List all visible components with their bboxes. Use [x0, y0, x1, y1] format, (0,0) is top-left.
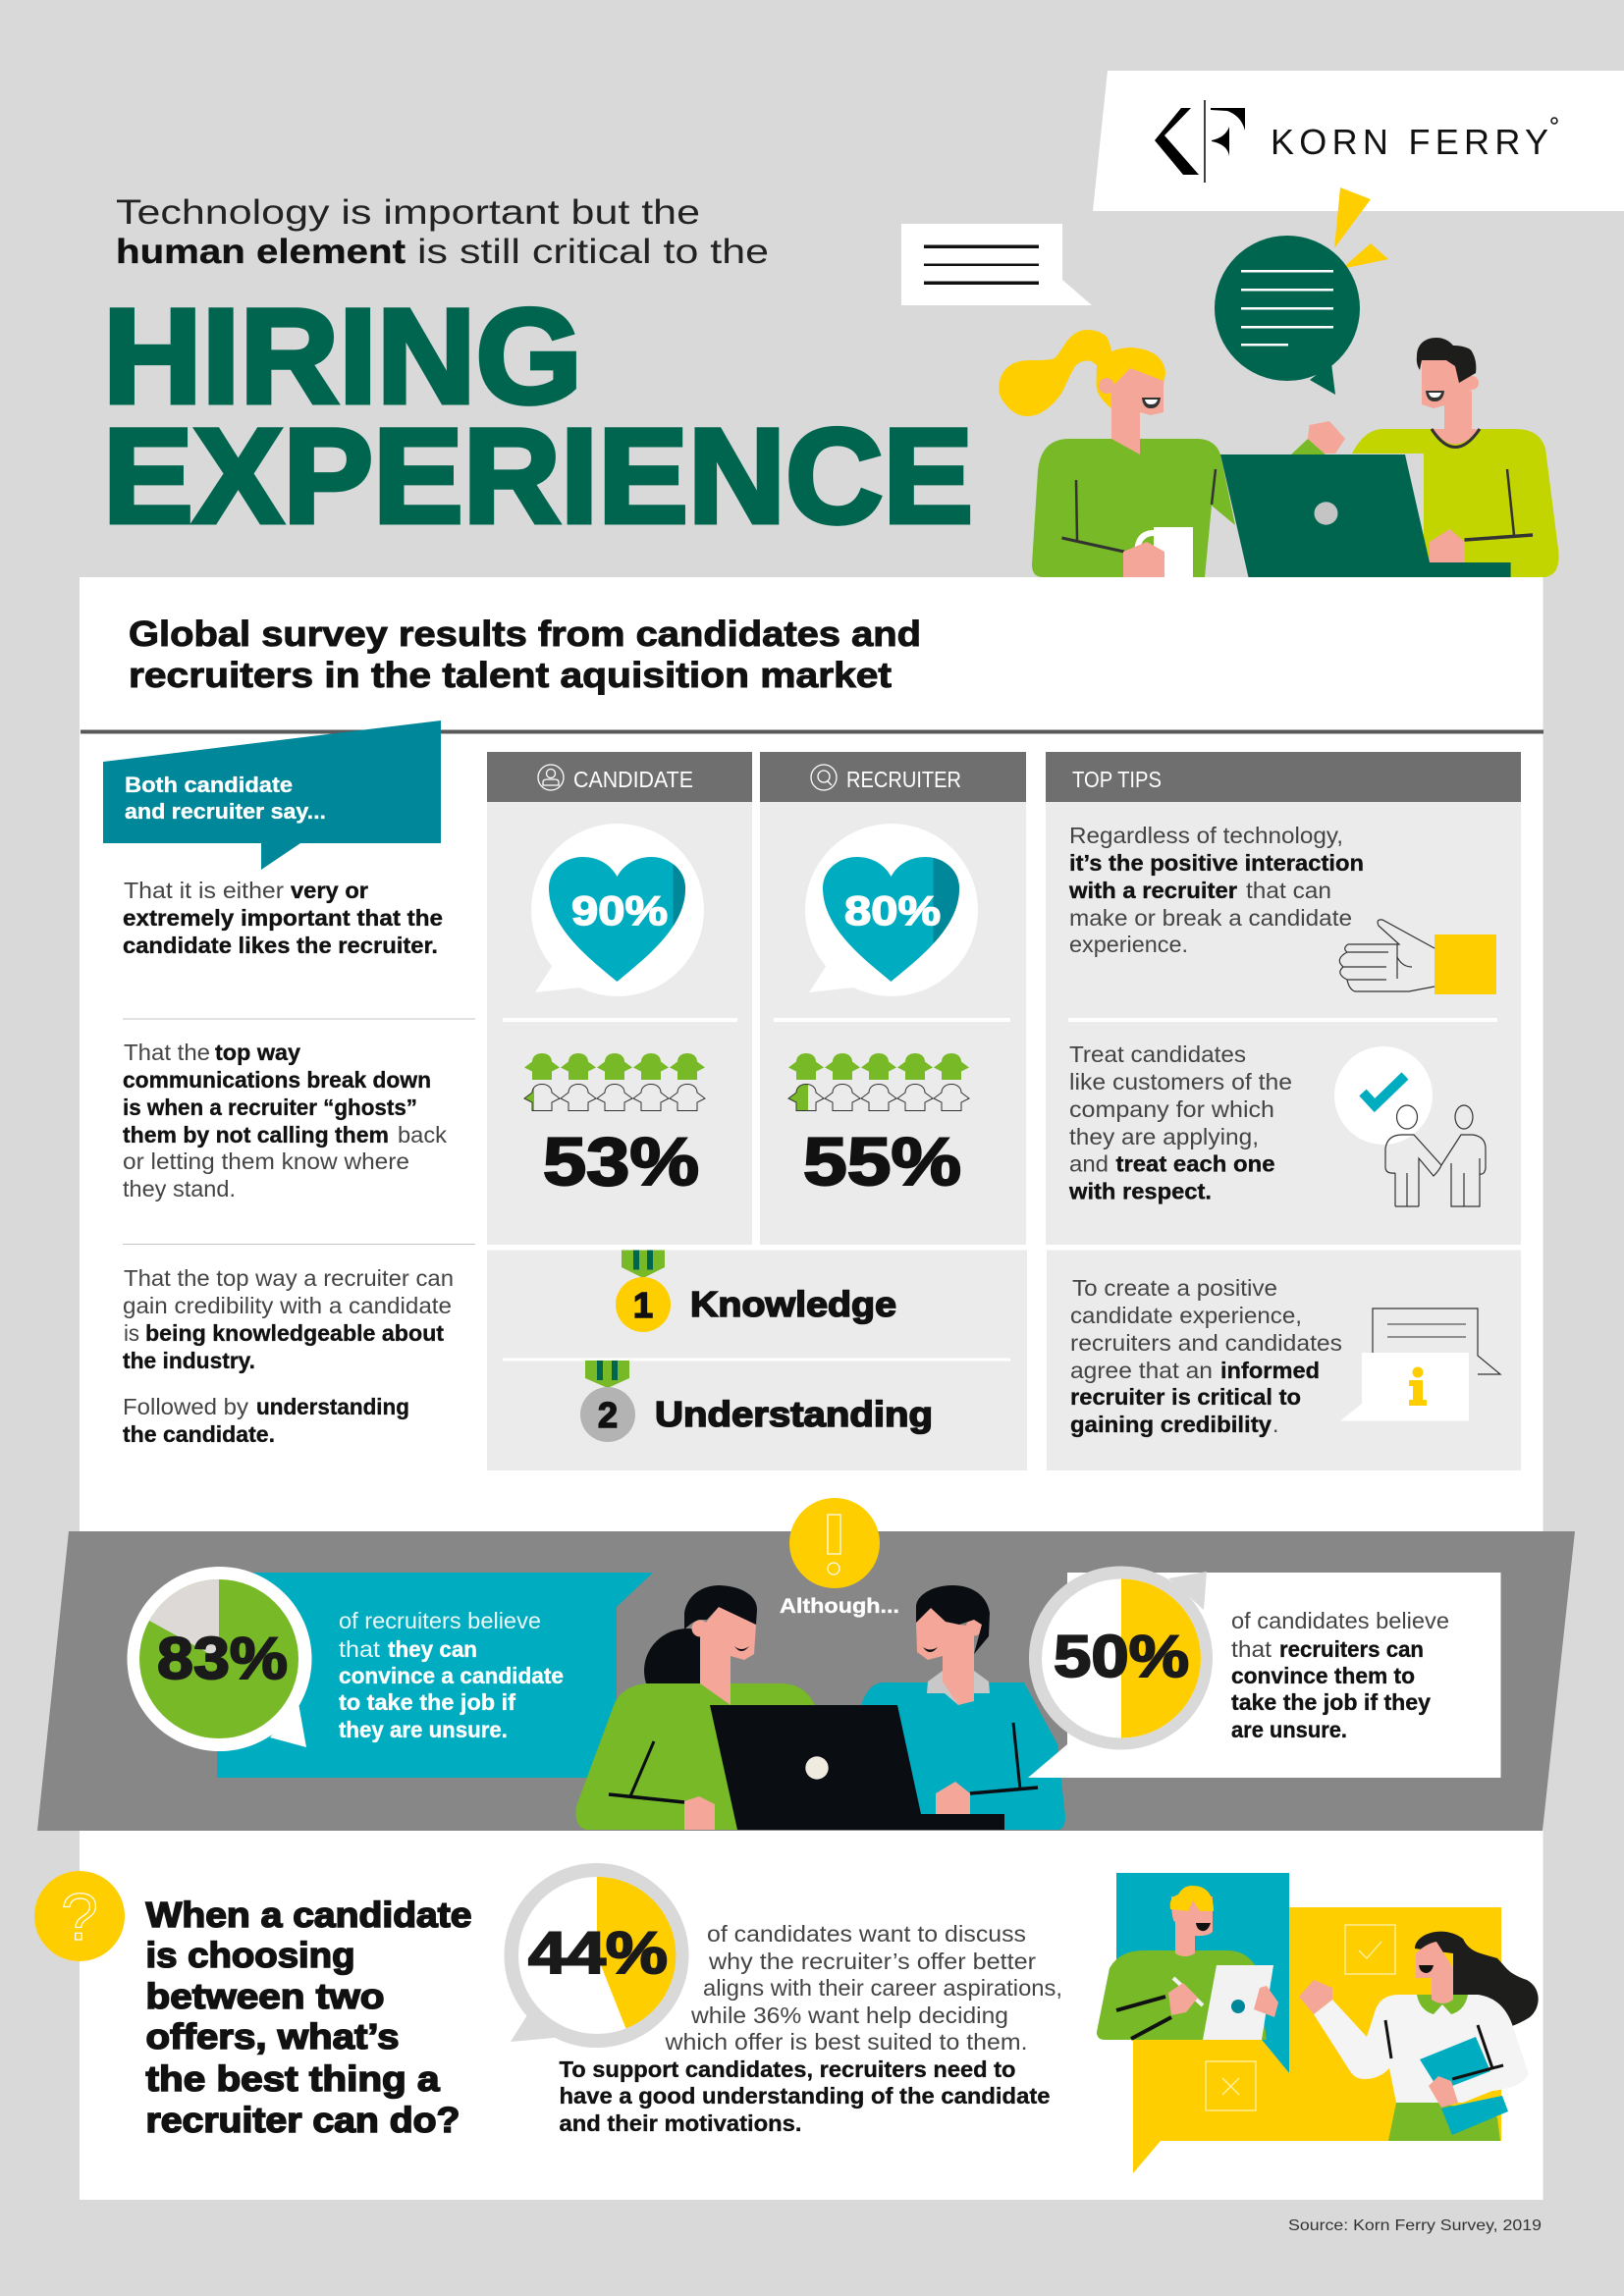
- tip 2 text: they are applying,: [1069, 1124, 1259, 1149]
- recruiters text: they are unsure.: [339, 1717, 508, 1742]
- text block: ghosting: is when a recruiter “ghosts”: [123, 1095, 417, 1120]
- icon: question mark: [34, 1871, 125, 1961]
- panel: grey band: [37, 1531, 1575, 1831]
- text block: likes the recruiter: candidate likes the recruiter.: [123, 933, 438, 958]
- icon: recruiter magnifier: [811, 765, 837, 790]
- pie chart: 44%: 44%: [528, 1920, 668, 1986]
- tip 1 text: Regardless of technology,: [1069, 823, 1343, 848]
- tip 2 text: and: [1069, 1150, 1109, 1176]
- heading: choosing between two offers: between two: [145, 1976, 385, 2016]
- panel: recruiter column: RECRUITER: [846, 767, 961, 792]
- tip 3 text: gaining credibility: [1070, 1412, 1272, 1437]
- callout: both candidate and recruiter say: [103, 721, 441, 870]
- medal 2: [580, 1361, 635, 1442]
- recruiters text: to take the job if: [339, 1689, 515, 1715]
- panel: candidates stat white box: [1028, 1573, 1500, 1778]
- icon: check and two people: [1334, 1046, 1486, 1206]
- panel: candidate column: CANDIDATE: [573, 767, 693, 792]
- pie chart: 50%: 50%: [1054, 1624, 1189, 1689]
- intro heading: Technology is important but the: [116, 193, 700, 232]
- logo panel: Korn Ferry: [1093, 71, 1624, 211]
- text block: 44% explanation: [560, 1921, 1062, 2136]
- illustration: two speech bubbles with people: [1097, 1873, 1539, 2173]
- pie chart: 44%: [505, 1863, 689, 2048]
- panel: recruiters stat teal box: [217, 1573, 653, 1778]
- main title: HIRING: [103, 282, 582, 432]
- pictogram row 55 percent: [788, 1053, 969, 1111]
- tip 1 text: with a recruiter: [1068, 878, 1237, 903]
- icon: white speech bubble: [901, 224, 1092, 305]
- tip 2 text: [1068, 1041, 1292, 1203]
- panel: top tips column: TOP TIPS: [1072, 767, 1162, 792]
- text block: 44% explanation: To support candidates, recruiters need to: [560, 2056, 1015, 2082]
- text block: ghosting: [123, 1040, 448, 1201]
- panel: tip 3: [1047, 1251, 1521, 1470]
- pie chart: 83%: [128, 1567, 312, 1751]
- text block: 44% explanation: of candidates want to discuss: [707, 1921, 1026, 1947]
- panel: white content sheet: [80, 577, 1543, 2200]
- intro heading: human element: [116, 233, 406, 271]
- text block: ghosting: That the: [124, 1040, 210, 1065]
- illustration: black laptop: [710, 1705, 1004, 1830]
- text block: ghosting: back: [398, 1122, 448, 1148]
- text block: ghosting: them by not calling them: [123, 1122, 389, 1148]
- candidates text: [1231, 1608, 1449, 1742]
- candidates text: take the job if they: [1231, 1689, 1431, 1715]
- tip 3 text: informed: [1220, 1358, 1320, 1383]
- text block: credibility: the candidate.: [123, 1421, 275, 1447]
- pictogram row 53 percent: [524, 1053, 705, 1111]
- main title: [103, 282, 973, 552]
- tip 3 text: recruiter is critical to: [1070, 1384, 1301, 1410]
- tip 2 text: Treat candidates: [1069, 1041, 1246, 1067]
- recruiters text: convince a candidate: [339, 1663, 564, 1688]
- text block: 44% explanation: while 36% want help deciding: [690, 2002, 1008, 2028]
- icon: question mark: ?: [61, 1880, 98, 1954]
- icon: handshake hand: [1339, 920, 1496, 994]
- figure: woman with folder: [1299, 1932, 1539, 2141]
- illustration: man in lime sweater: [1291, 338, 1559, 577]
- text block: 44% explanation: aligns with their career aspirations,: [703, 1975, 1062, 2001]
- tip 3 text: To create a positive: [1072, 1275, 1277, 1301]
- text block: 44% explanation: why the recruiter’s offer better: [708, 1949, 1036, 1974]
- figure: man with tablet: [1097, 1886, 1278, 2040]
- text block: ghosting: communications break down: [123, 1067, 431, 1093]
- illustration: woman at laptop: [575, 1585, 815, 1830]
- icon: exclamation: [789, 1498, 880, 1588]
- heart bubble 80%: 80%: [844, 887, 941, 934]
- subtitle: Global survey results from candidates and: [129, 614, 921, 654]
- subtitle: recruiters in the talent aquisition market: [129, 655, 892, 695]
- text block: likes the recruiter: [123, 878, 443, 958]
- panel: recruiter column: [760, 752, 1026, 1245]
- heading: choosing between two offers: offers, what’s: [145, 2016, 399, 2056]
- icon: candidate person: [538, 765, 564, 790]
- text block: credibility: Followed by: [123, 1394, 249, 1419]
- recruiters text: [339, 1608, 564, 1742]
- text block: 44% explanation: which offer is best suited to them.: [664, 2029, 1027, 2055]
- illustration: green laptop: [1220, 454, 1511, 577]
- illustration: woman with yellow ponytail: [999, 330, 1235, 577]
- text block: credibility: [123, 1265, 454, 1447]
- medal 1: [616, 1251, 671, 1332]
- candidates text: recruiters can: [1279, 1636, 1424, 1662]
- recruiters text: they can: [388, 1636, 477, 1662]
- heart bubble 90%: 90%: [571, 887, 668, 934]
- panel: top tips column: [1046, 752, 1521, 1245]
- main title: EXPERIENCE: [103, 401, 973, 552]
- illustration: man at laptop: [861, 1585, 1065, 1830]
- tip 2 text: treat each one: [1115, 1150, 1274, 1176]
- tip 1 text: make or break a candidate: [1069, 905, 1352, 931]
- text block: ghosting: they stand.: [123, 1176, 236, 1201]
- heading: choosing between two offers: is choosing: [145, 1935, 355, 1975]
- text block: credibility: the industry.: [123, 1348, 255, 1373]
- stat 55%: 55%: [803, 1124, 961, 1200]
- heading: choosing between two offers: recruiter can do?: [145, 2100, 460, 2140]
- heading: choosing between two offers: the best thing a: [145, 2058, 441, 2099]
- source note: Source: Korn Ferry Survey, 2019: [1288, 2217, 1542, 2234]
- tip 1 text: experience.: [1069, 932, 1188, 957]
- panel: knowledge and understanding: [487, 1251, 1027, 1470]
- icon: green speech bubble with yellow shards: [1215, 187, 1388, 395]
- tip 3 text: [1070, 1275, 1342, 1437]
- tip 3 text: .: [1272, 1412, 1278, 1437]
- label: knowledge: Knowledge: [690, 1284, 896, 1324]
- pie chart: 50%: [1029, 1567, 1213, 1749]
- heart bubble 80%: [805, 824, 978, 996]
- medal 2: 2: [598, 1395, 618, 1435]
- tip 3 text: agree that an: [1070, 1358, 1213, 1383]
- text block: credibility: being knowledgeable about: [145, 1320, 444, 1346]
- intro heading: [116, 193, 769, 271]
- heading: choosing between two offers: [145, 1895, 471, 2140]
- candidates text: are unsure.: [1231, 1717, 1347, 1742]
- tip 1 text: it’s the positive interaction: [1069, 850, 1364, 876]
- tip 2 text: with respect.: [1068, 1178, 1212, 1203]
- intro heading: is still critical to the: [417, 233, 769, 271]
- logo panel: Korn Ferry: KORN FERRY: [1271, 122, 1548, 162]
- tip 1 text: [1068, 823, 1364, 957]
- icon: info bubbles: [1340, 1308, 1500, 1421]
- tip 2 text: like customers of the: [1069, 1069, 1292, 1095]
- text block: likes the recruiter: very or: [291, 878, 368, 903]
- callout: both candidate and recruiter say: Both candidate: [125, 773, 293, 797]
- subtitle: [129, 614, 921, 695]
- text block: ghosting: top way: [215, 1040, 300, 1065]
- candidates text: of candidates believe: [1231, 1608, 1449, 1633]
- label: although: Although...: [780, 1595, 899, 1618]
- tip 3 text: candidate experience,: [1070, 1303, 1302, 1328]
- tip 1 text: that can: [1246, 878, 1331, 903]
- tip 3 text: recruiters and candidates: [1070, 1330, 1342, 1356]
- callout: both candidate and recruiter say: and recruiter say...: [125, 799, 326, 824]
- pie chart: 83%: 83%: [157, 1626, 288, 1691]
- text block: likes the recruiter: extremely important that the: [123, 905, 443, 931]
- text block: credibility: understanding: [256, 1394, 409, 1419]
- text block: credibility: is: [124, 1320, 139, 1346]
- recruiters text: that: [339, 1636, 381, 1662]
- text block: ghosting: or letting them know where: [123, 1148, 409, 1174]
- stat 53%: 53%: [543, 1124, 699, 1200]
- tip 2 text: company for which: [1069, 1096, 1274, 1122]
- text block: likes the recruiter: That it is either: [124, 878, 284, 903]
- candidates text: convince them to: [1231, 1663, 1415, 1688]
- heading: choosing between two offers: When a candidate: [145, 1895, 471, 1935]
- recruiters text: of recruiters believe: [339, 1608, 541, 1633]
- panel: candidate column: [487, 752, 752, 1245]
- text block: 44% explanation: and their motivations.: [560, 2110, 801, 2136]
- medal 1: 1: [633, 1285, 653, 1325]
- text block: credibility: That the top way a recruiter can: [124, 1265, 454, 1291]
- text block: credibility: gain credibility with a candidate: [123, 1293, 452, 1318]
- candidates text: that: [1231, 1636, 1272, 1662]
- text block: 44% explanation: have a good understanding of the candidate: [560, 2083, 1051, 2109]
- heart bubble 90%: [531, 824, 704, 996]
- label: understanding: Understanding: [655, 1394, 933, 1434]
- icon: cross box: [1206, 2061, 1256, 2110]
- icon: check box: [1345, 1925, 1395, 1974]
